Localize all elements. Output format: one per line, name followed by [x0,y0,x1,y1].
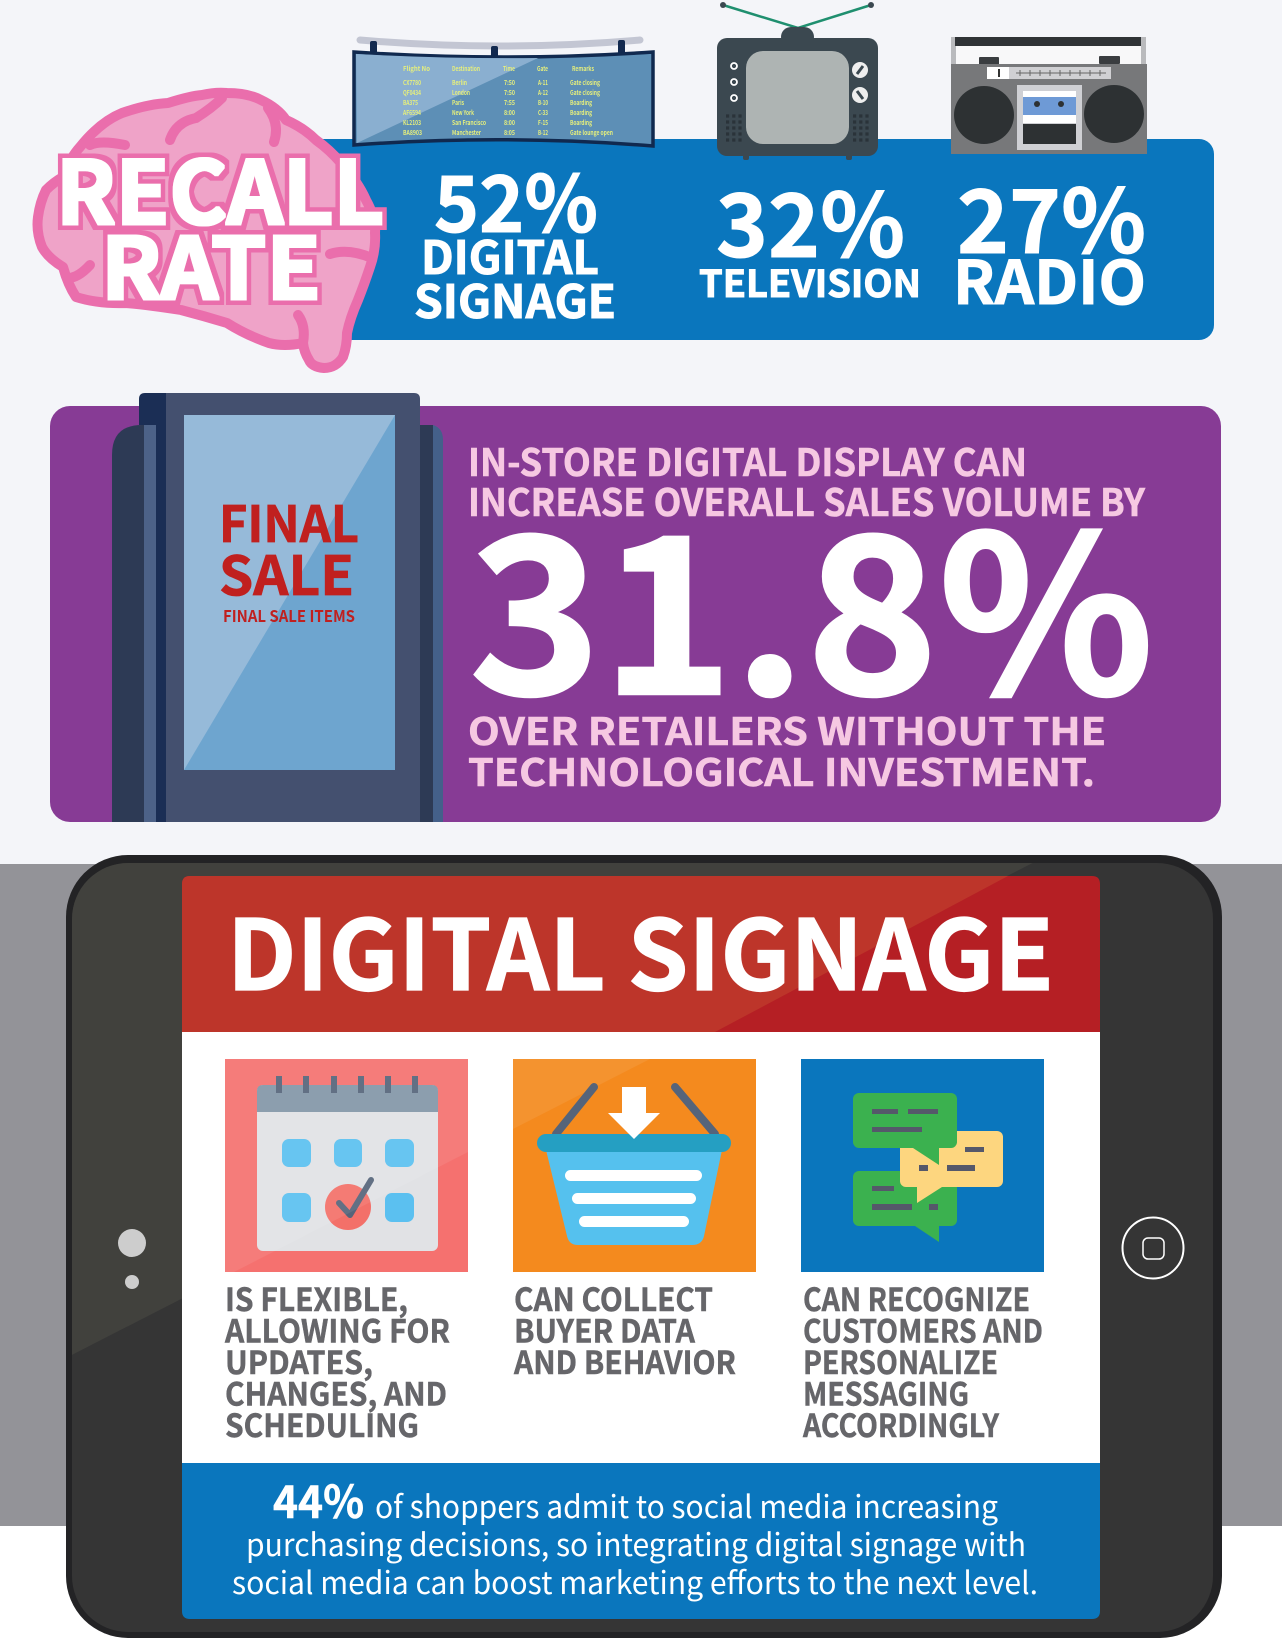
icon: flight departures board: 8:05 [504,127,515,137]
icon: flight departures board: 8:00 [504,107,515,117]
stat: television 32%: TELEVISION [699,254,921,308]
icon: boombox radio [951,37,1147,154]
text: display can increase sales [468,432,1146,527]
icon: flight departures board: C-33 [538,107,548,117]
text: is flexible: UPDATES, [225,1338,373,1384]
footer: social media stat: social media can boost marketing efforts to the next level. [232,1558,1038,1603]
icon: flight departures board: 7:50 [504,87,515,97]
icon: flight departures board: London [452,87,470,97]
icon: flight departures board: Gate closing [570,87,600,97]
icon: flight departures board: Gate lounge open [570,127,613,137]
text: can recognize: ACCORDINGLY [802,1401,999,1447]
icon: flight departures board: B-12 [538,127,548,137]
text: can recognize: MESSAGING [803,1370,969,1416]
text: can recognize: CUSTOMERS AND [803,1306,1043,1352]
icon: flight departures board: Destination [452,63,480,73]
icon: flight departures board: F-15 [538,117,548,127]
icon: flight departures board: KL2103 [403,117,421,127]
tile: chat bubbles icon [801,1059,1044,1272]
icon: flight departures board: Time [503,63,515,73]
icon: flight departures board: Berlin [452,77,467,87]
icon: flight departures board: Boarding [570,107,592,117]
text: can collect: BUYER DATA [514,1306,695,1352]
text: can collect [513,1275,736,1384]
footer: social media stat: purchasing decisions, so integrating digital signage with [246,1520,1026,1565]
kiosk sale text: FINAL [219,485,359,557]
title: recall rate: RATE [101,201,321,324]
text: over retailers: OVER RETAILERS WITHOUT THE [468,701,1106,756]
icon: flight departures board: BA375 [403,97,418,107]
footer: social media stat [182,1463,1100,1619]
screen body [182,1032,1100,1463]
icon: flight departures board: 8:00 [504,117,515,127]
big number: 31.8% [469,441,1154,757]
footer: social media stat: of shoppers admit to social media increasing [375,1482,998,1527]
text: is flexible: IS FLEXIBLE, [225,1275,408,1321]
icon: flight departures board: Boarding [570,97,592,107]
title: recall rate [56,124,384,324]
title: recall rate: RECALL [56,124,384,250]
footer: social media stat: 44% [273,1466,364,1531]
icon: flight departures board: B-10 [538,97,548,107]
kiosk sale text: FINAL SALE ITEMS [223,603,355,627]
icon: flight departures board: Boarding [570,117,592,127]
icon: home button [1122,1218,1184,1278]
icon: flight departures board: 7:50 [504,77,515,87]
icon: flight departures board: San Francisco [452,117,486,127]
panel: in-store sales [50,393,1221,822]
text: is flexible [224,1275,450,1447]
icon: flight departures board: CX7780 [403,77,421,87]
stat: digital signage 52%: SIGNAGE [414,266,616,332]
text: is flexible: SCHEDULING [225,1401,419,1447]
icon: flight departures board: 7:55 [504,97,515,107]
text: over retailers [468,701,1106,797]
panel: tablet [60,850,1222,1638]
stat: radio 27%: 27% [957,152,1146,279]
icon: flight departures board: Paris [452,97,465,107]
kiosk sale text: SALE [219,532,354,611]
tile: shopping basket icon [513,1059,756,1272]
band: gray background [0,864,1282,1526]
icon: flight departures board: BA8903 [403,127,422,137]
kiosk sale text [219,485,359,627]
icon: flight departures board: Remarks [572,63,595,73]
screen header [182,876,1100,1032]
icon: flight departures board: Flight No [403,63,430,73]
text: is flexible: ALLOWING FOR [224,1306,450,1352]
icon: flight departures board: A-11 [537,77,548,87]
icon: flight departures board: AF6594 [402,107,421,117]
icon: tablet camera and sensor [118,1229,146,1289]
icon: flight departures board: Gate closing [570,77,600,87]
text: can collect: AND BEHAVIOR [513,1338,736,1384]
text: can collect: CAN COLLECT [514,1275,713,1321]
text: display can increase sales: IN-STORE DIGITAL DISPLAY CAN [468,432,1027,487]
text: can recognize: PERSONALIZE [803,1338,998,1384]
stat: digital signage 52%: 52% [434,143,598,255]
stat: digital signage 52% [414,143,616,332]
stat: television 32%: 32% [716,156,905,283]
text: can recognize: CAN RECOGNIZE [803,1275,1030,1321]
text: over retailers: TECHNOLOGICAL INVESTMENT. [468,742,1095,797]
icon: flight departures board [354,40,653,146]
icon: flight departures board: Manchester [452,127,481,137]
icon: flight departures board: Gate [537,63,548,73]
stat: radio 27%: RADIO [953,235,1146,322]
text: is flexible: CHANGES, AND [225,1370,447,1416]
tile: calendar icon [225,1059,468,1272]
icon: flight departures board: New York [452,107,474,117]
icon: flight departures board: A-12 [537,87,548,97]
icon: television [717,2,878,160]
text: display can increase sales: INCREASE OVERALL SALES VOLUME BY [468,472,1146,527]
icon: flight departures board: QF0434 [403,87,421,97]
stat: digital signage 52%: DIGITAL [421,222,599,288]
text: can recognize [802,1275,1043,1447]
icon: digital kiosk [112,393,443,822]
icon: brain [38,93,375,368]
heading: digital signage: DIGITAL SIGNAGE [227,877,1054,1018]
panel: recall rate [300,2,1214,340]
